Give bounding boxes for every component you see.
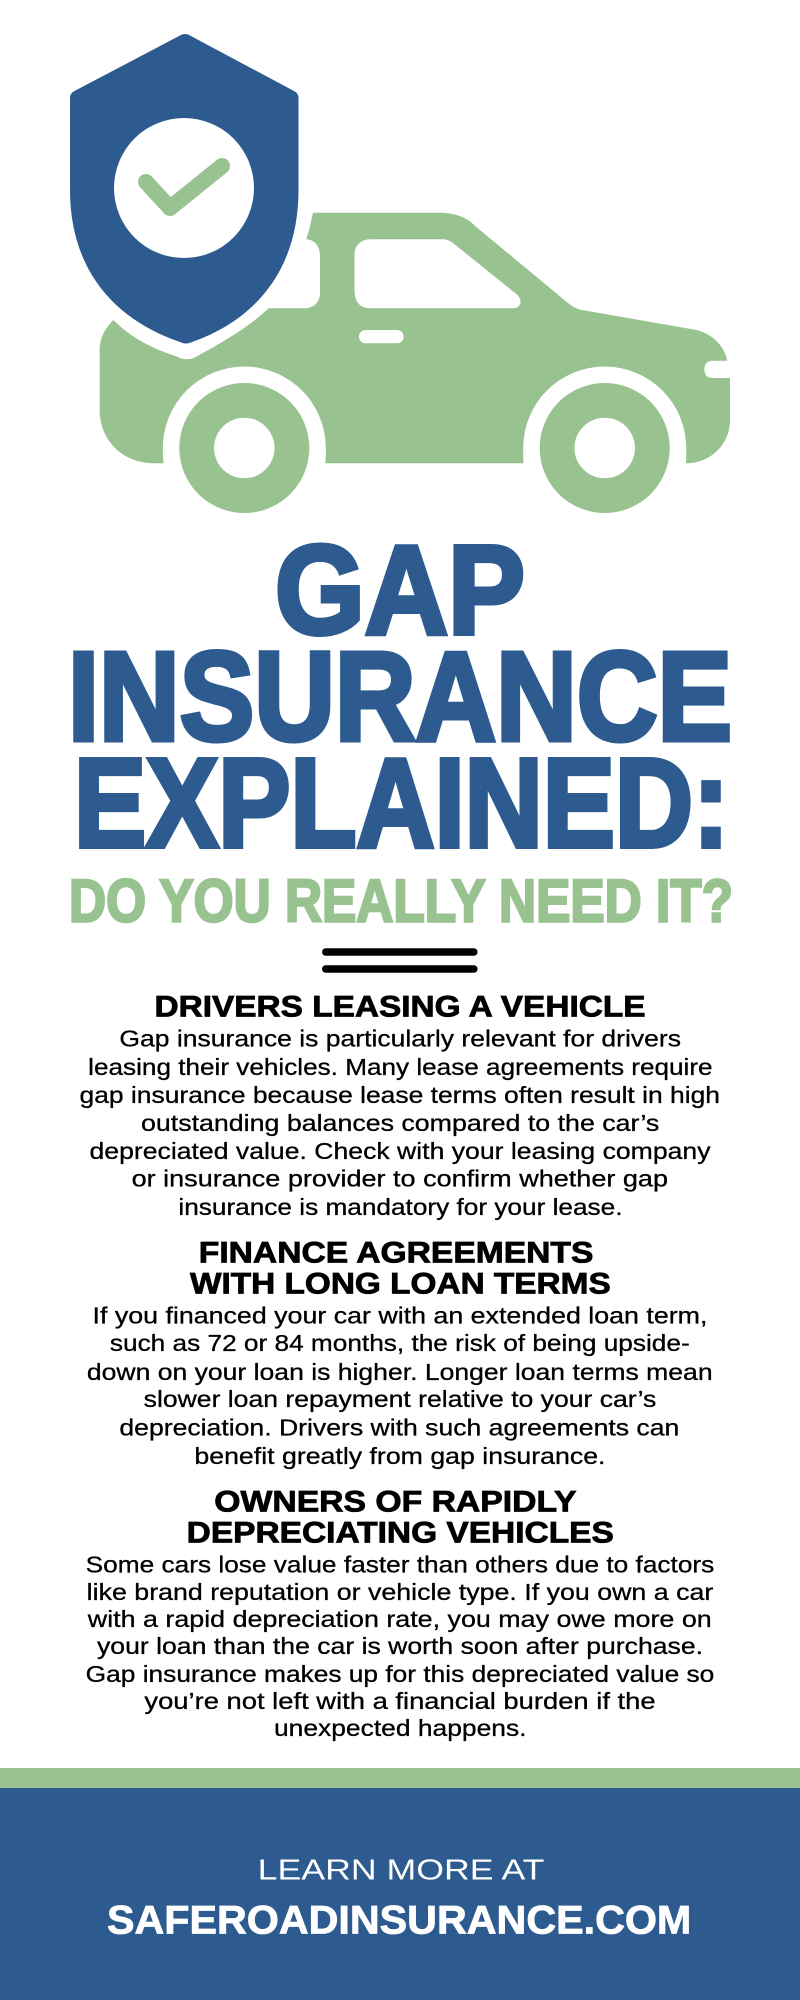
heading: DEPRECIATING VEHICLES [187, 1516, 614, 1549]
footer panel [0, 1788, 800, 2000]
title: GAP [275, 520, 525, 660]
panel: finance agreements with long loan terms [87, 1237, 713, 1469]
text block: leasing their vehicles. Many lease agreements require [88, 1054, 713, 1080]
text block: Gap insurance makes up for this depreciated value so [86, 1661, 714, 1687]
text block: benefit greatly from gap insurance. [194, 1443, 606, 1469]
green band [0, 1768, 800, 1788]
icon: front wheel [540, 383, 670, 513]
text block: or insurance provider to confirm whether gap [132, 1166, 668, 1192]
panel: owners of rapidly depreciating vehicles [86, 1486, 714, 1741]
heading [190, 1237, 611, 1300]
text block: Gap insurance is particularly relevant for drivers [119, 1026, 681, 1052]
heading: FINANCE AGREEMENTS [199, 1237, 593, 1270]
text block: with a rapid depreciation rate, you may owe more on [87, 1606, 712, 1632]
text block: slower loan repayment relative to your car’s [144, 1386, 656, 1412]
call to action text: LEARN MORE AT [258, 1854, 545, 1886]
text block: you’re not left with a financial burden if the [144, 1688, 656, 1714]
text block: depreciation. Drivers with such agreements can [119, 1415, 679, 1441]
text block: If you financed your car with an extended loan term, [92, 1302, 707, 1328]
text block: like brand reputation or vehicle type. If you own a car [87, 1579, 714, 1605]
text block [80, 1026, 720, 1220]
text block [86, 1552, 714, 1741]
divider: double rule [322, 948, 478, 973]
text block: down on your loan is higher. Longer loan terms mean [87, 1359, 713, 1385]
text block: unexpected happens. [274, 1715, 526, 1741]
icon: rear wheel [179, 383, 309, 513]
text block: your loan than the car is worth soon after purchase. [97, 1633, 703, 1659]
heading [187, 1486, 614, 1549]
heading: WITH LONG LOAN TERMS [190, 1267, 611, 1300]
title: INSURANCE [68, 626, 732, 767]
icon: car body [100, 213, 730, 463]
panel: drivers leasing a vehicle [80, 991, 720, 1220]
website url: SAFEROADINSURANCE.COM [107, 1898, 691, 1942]
text block: such as 72 or 84 months, the risk of being upside- [110, 1330, 690, 1356]
heading: OWNERS OF RAPIDLY [214, 1486, 577, 1519]
heading: DRIVERS LEASING A VEHICLE [154, 991, 646, 1024]
text block: depreciated value. Check with your leasing company [90, 1138, 711, 1164]
icon: insured car with shield [70, 34, 730, 513]
text block: insurance is mandatory for your lease. [178, 1194, 622, 1220]
title [68, 520, 732, 874]
text block: outstanding balances compared to the car’s [141, 1110, 659, 1136]
icon: shield with check mark [70, 34, 298, 344]
text block: gap insurance because lease terms often result in high [80, 1082, 720, 1108]
text block [87, 1302, 713, 1469]
text block: Some cars lose value faster than others due to factors [86, 1552, 714, 1578]
